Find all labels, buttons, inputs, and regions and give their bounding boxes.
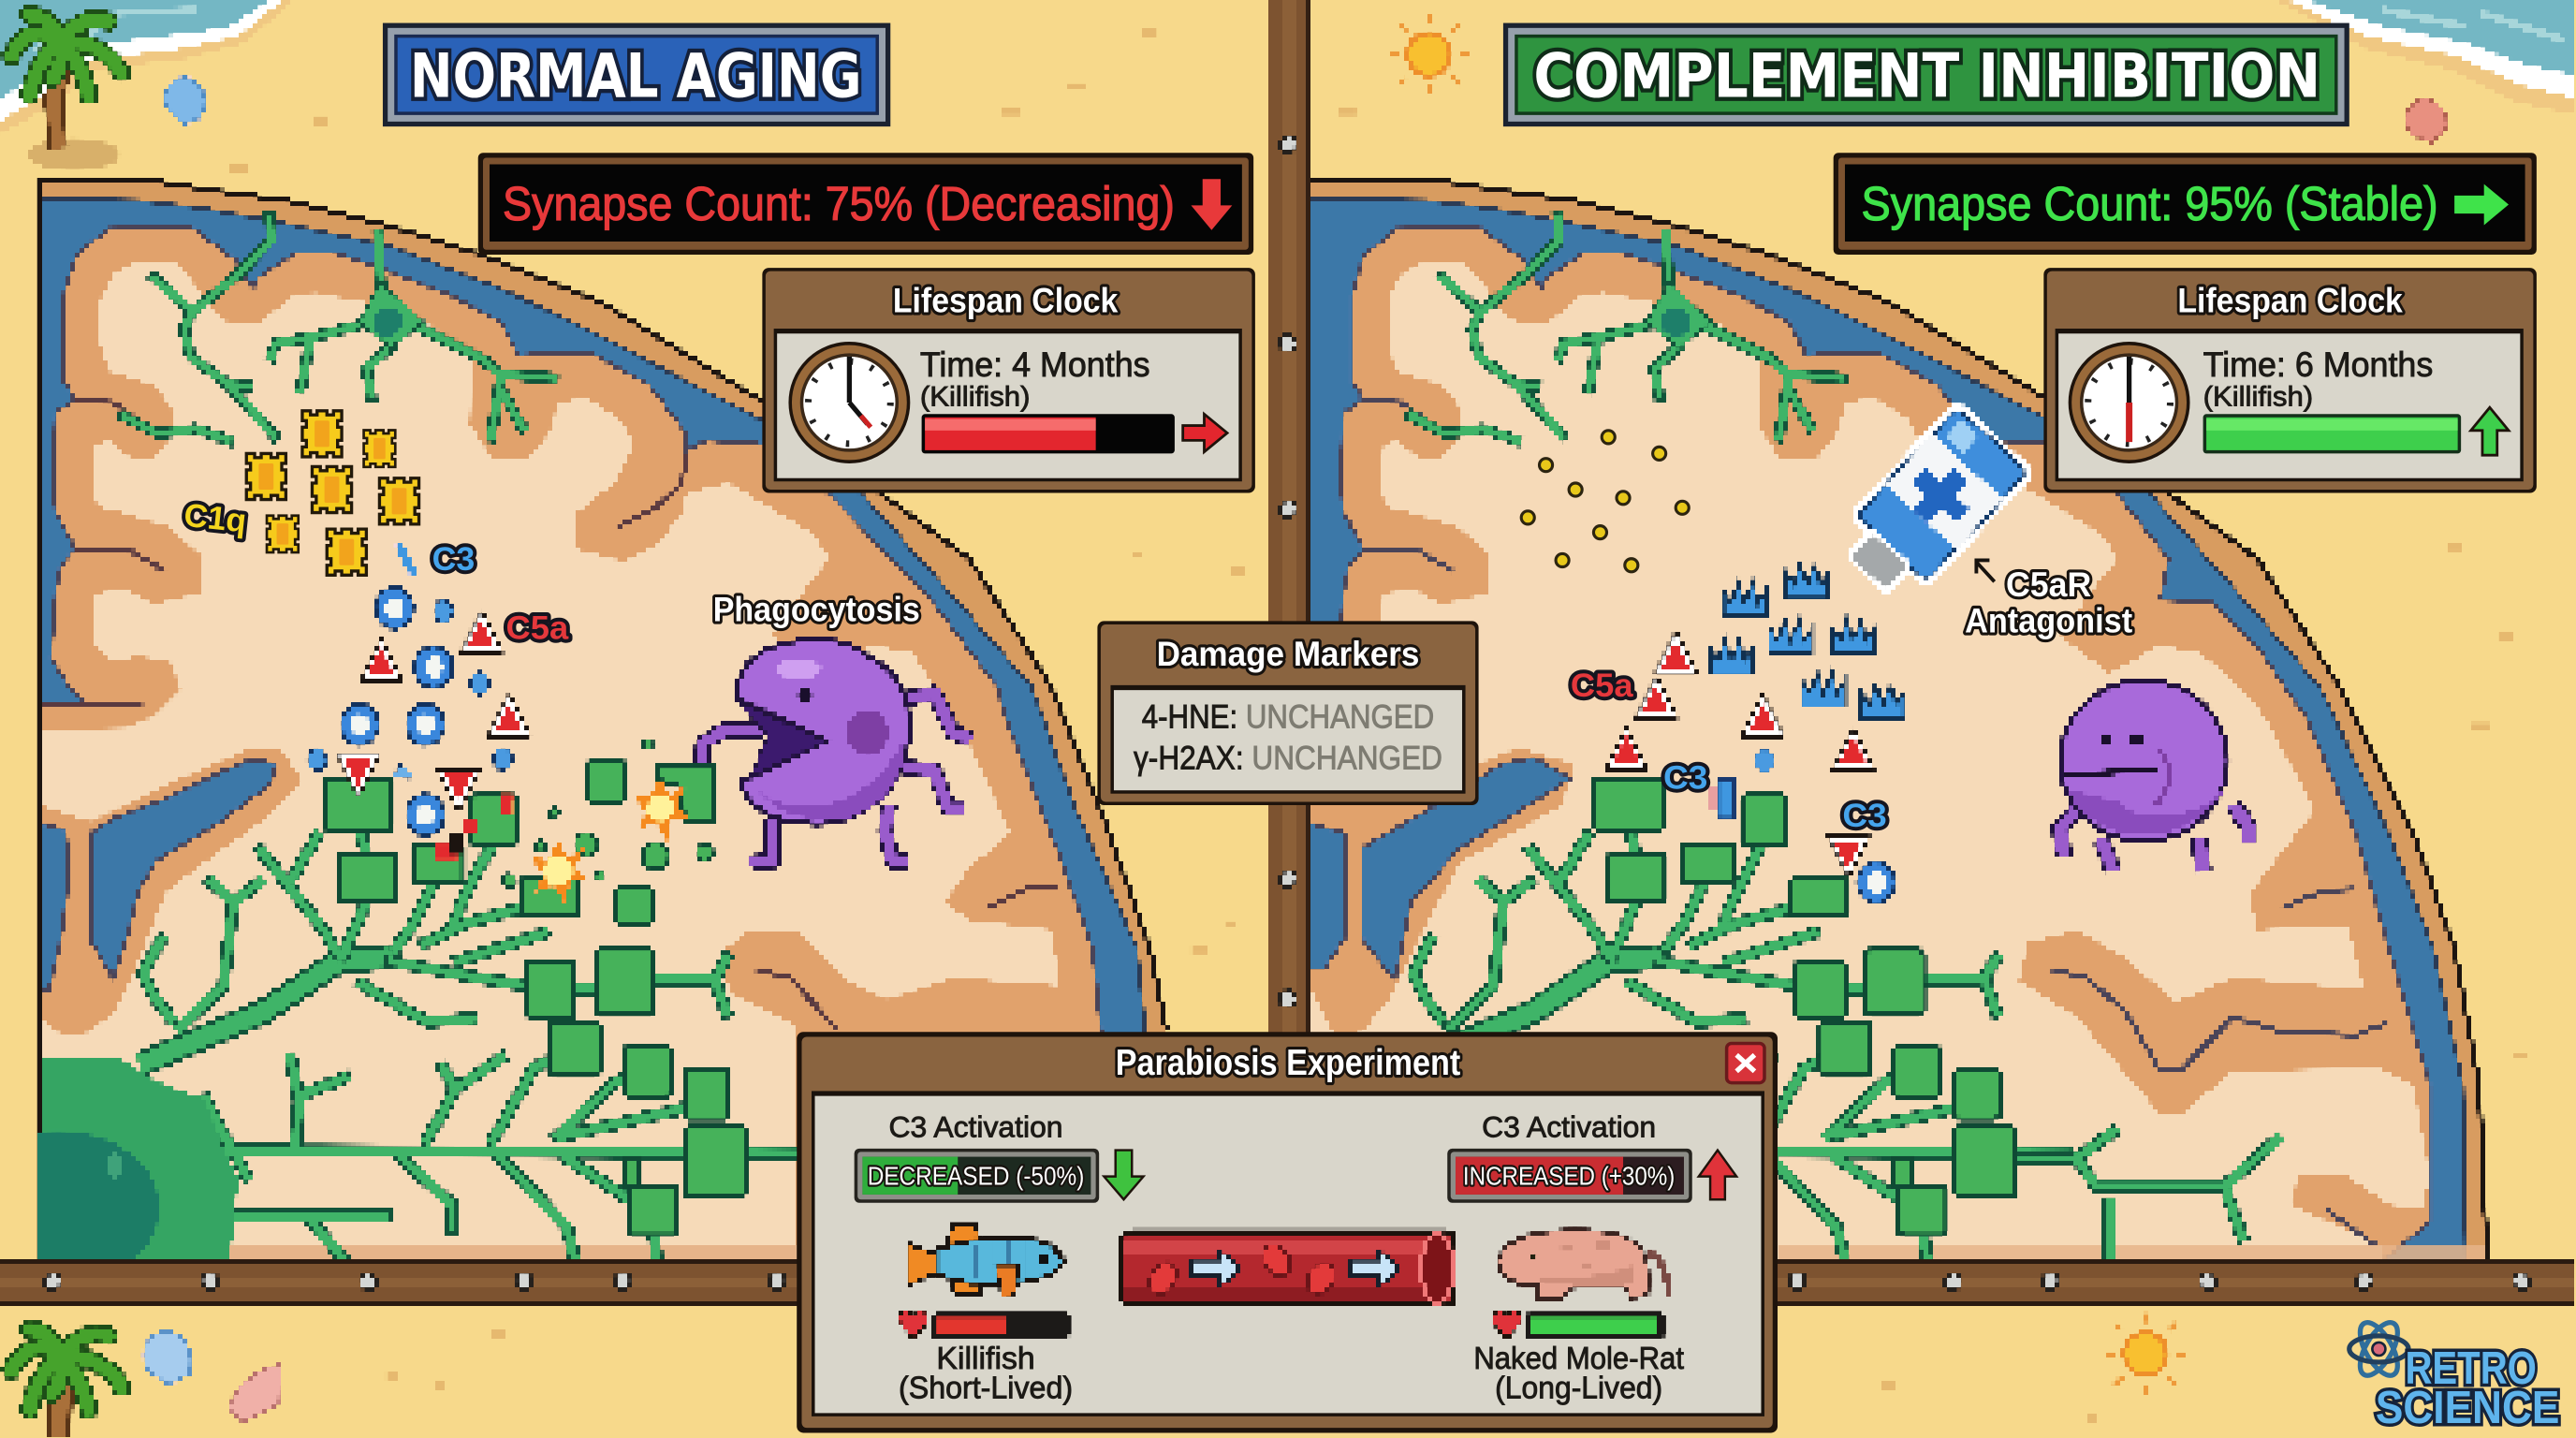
readout: Synapse Count: 75% (Decreasing) (503, 177, 1175, 230)
shell: pink bottom left (228, 1364, 281, 1421)
banner: complement inhibition (1503, 23, 2349, 126)
label: C1q: C1q (183, 497, 248, 540)
drug bottle (1827, 399, 2037, 611)
arrow: right (1183, 414, 1227, 452)
legs (2060, 805, 2249, 873)
arrow: right (2454, 184, 2509, 225)
synapse damage bits (437, 794, 513, 859)
brain: right hemisphere (1310, 165, 2509, 1265)
synapse debris (503, 740, 713, 888)
heading: Lifespan Clock (2177, 281, 2403, 319)
label: C5a right: C5a (1571, 668, 1633, 704)
blood cells (1144, 1240, 1339, 1299)
killifish label: (Short-Lived) (899, 1372, 1073, 1406)
clock icon (790, 344, 909, 462)
C3 fragment (399, 547, 414, 574)
body outline (1848, 399, 2037, 590)
cream inner matter (1310, 261, 2430, 1262)
close button (1727, 1043, 1764, 1083)
blue body (1857, 407, 2027, 580)
lower shade (2067, 785, 2226, 835)
C3 rings and dots, left (306, 586, 513, 837)
mouth (738, 701, 827, 777)
pixel icons in parabiosis panel (900, 1225, 1669, 1339)
label: Phagocytosis: Phagocytosis (713, 590, 920, 628)
C1q clusters (246, 411, 419, 575)
body (2060, 681, 2228, 842)
cortex outer ring (1310, 165, 2509, 1265)
sulci (1362, 401, 2389, 1245)
tiny C1q dots (1521, 431, 1689, 572)
blue meninges band (42, 197, 1147, 1032)
cortex outer ring (42, 183, 1165, 1032)
retro science logo (2376, 1343, 2559, 1433)
palm tree: bottom left (11, 1329, 122, 1438)
blue meninges band (1310, 198, 2466, 1262)
neuron: right lower (1410, 779, 2282, 1260)
C5a triangles, right (1606, 634, 1873, 875)
parabiosis experiment panel (797, 1032, 1778, 1432)
right macrophage: idle (2060, 681, 2249, 873)
label: C3 Activation (1482, 1110, 1656, 1144)
time text: Time: 4 Months (920, 345, 1150, 384)
lifespan bar (2203, 414, 2461, 453)
mole-rat label: (Long-Lived) (1495, 1372, 1662, 1406)
palm tree: top left (11, 15, 122, 171)
right brain outline (1310, 179, 2487, 1262)
wood beam: right horizontal (1771, 1260, 2576, 1305)
flow arrows (1191, 1251, 1401, 1286)
heading: Lifespan Clock (893, 281, 1119, 319)
bolts (44, 137, 2530, 1290)
label (1886, 434, 2002, 550)
killifish label (899, 1342, 1073, 1406)
sea: top left corner (0, 0, 292, 135)
mole-rat label (1473, 1342, 1685, 1406)
sun: bottom (2104, 1313, 2187, 1395)
neuron: right top (1412, 217, 1841, 440)
macrophage: eating (701, 639, 971, 862)
mouth (2063, 769, 2159, 775)
atom icon (2349, 1317, 2408, 1381)
neuron: left top (124, 217, 553, 440)
orange gyri (39, 227, 1150, 1262)
heart right (1492, 1311, 1520, 1339)
scene labels (183, 497, 2132, 834)
retro science logo: RETRO (2405, 1343, 2537, 1394)
C5a triangles, left (339, 613, 529, 809)
clock icon (2070, 344, 2188, 462)
cross (1899, 454, 1983, 537)
title: NORMAL AGING (410, 42, 862, 112)
sun: top (1388, 13, 1471, 95)
fissure (39, 749, 302, 1035)
cap (1848, 531, 1910, 593)
left readout (855, 1110, 1144, 1203)
species text: (Killifish) (2203, 382, 2313, 413)
arrow: down (1104, 1151, 1144, 1199)
label: C5aR Antagonist: Antagonist (1965, 602, 2132, 640)
mole-rat label: Naked Mole-Rat (1473, 1342, 1685, 1376)
killifish icon (909, 1225, 1064, 1297)
label: C3 Activation (889, 1110, 1063, 1144)
explosion (633, 777, 690, 842)
cream inner matter (37, 261, 1060, 1262)
lifespan clock: left (762, 268, 1255, 493)
wood beam: vertical (1266, 0, 1311, 1038)
shell: pink top right (2406, 98, 2447, 143)
status text: DECREASED (-50%) (868, 1161, 1084, 1190)
H2AX row: γ-H2AX: UNCHANGED (1134, 740, 1442, 776)
eyes (2100, 735, 2143, 746)
label: C5aR Antagonist (1965, 565, 2132, 640)
status bar (1447, 1149, 1692, 1203)
highlight (775, 659, 822, 679)
shell: blue bottom left (144, 1331, 191, 1386)
sea: top right corner (2276, 0, 2576, 115)
body (738, 639, 909, 824)
arrow: down (1191, 179, 1232, 230)
arrow: up (1699, 1151, 1736, 1199)
nucleus (846, 710, 889, 756)
fissure (1310, 748, 1573, 1035)
blue receptor crowns (1710, 564, 1904, 718)
orange gyri (1310, 227, 2430, 1262)
bottom shading (1778, 1245, 2487, 1262)
legs (701, 694, 971, 862)
lower shade (759, 740, 904, 820)
neuron: left lower with soma (0, 779, 797, 1284)
label: C5aR Antagonist: C5aR (2006, 565, 2091, 604)
heart left (900, 1311, 928, 1339)
lifespan bar (922, 414, 1175, 453)
left brain outline (37, 179, 1166, 1262)
time text: Time: 6 Months (2203, 345, 2433, 384)
explosion (531, 840, 588, 903)
cheek (2156, 748, 2170, 805)
label: C3 right lower: C3 (1842, 798, 1887, 834)
species text: (Killifish) (920, 382, 1030, 413)
label: C3 right upper: C3 (1663, 759, 1707, 796)
heading: Damage Markers (1157, 635, 1419, 673)
lifespan clock: right (2043, 268, 2537, 493)
heading: Parabiosis Experiment (1116, 1043, 1460, 1083)
title: COMPLEMENT INHIBITION (1533, 42, 2320, 112)
health bar right (1525, 1313, 1664, 1339)
detached synapse boxes (588, 759, 713, 925)
readout: Synapse Count: 95% (Stable) (1862, 177, 2438, 230)
status text: INCREASED (+30%) (1463, 1161, 1675, 1190)
banner: normal aging (383, 23, 890, 126)
wood beam: left horizontal (0, 1260, 805, 1305)
health bar left (931, 1313, 1070, 1339)
shell: blue top left (165, 77, 205, 125)
blood vessel icon (1119, 1229, 1457, 1308)
damage markers panel (1097, 621, 1479, 805)
4-HNE row: 4-HNE: UNCHANGED (1142, 699, 1434, 736)
arrow: up (2471, 407, 2509, 455)
brain: left hemisphere (33, 165, 1232, 1265)
arrow: to bottle (1976, 560, 1995, 581)
retro science logo: SCIENCE (2376, 1383, 2559, 1433)
label: C3: C3 (432, 541, 475, 578)
bottom shading (37, 1245, 810, 1262)
killifish label: Killifish (936, 1342, 1035, 1376)
highlight (1946, 420, 1978, 453)
right readout (1447, 1110, 1736, 1203)
synapse count: left (478, 153, 1253, 255)
sulci (39, 401, 1060, 1030)
label: C5a: C5a (506, 610, 569, 647)
naked mole-rat icon (1499, 1230, 1669, 1299)
C3 bits, right (1708, 748, 1896, 904)
eye (798, 689, 812, 704)
synapse count: right (1834, 153, 2537, 255)
status bar (855, 1149, 1099, 1203)
